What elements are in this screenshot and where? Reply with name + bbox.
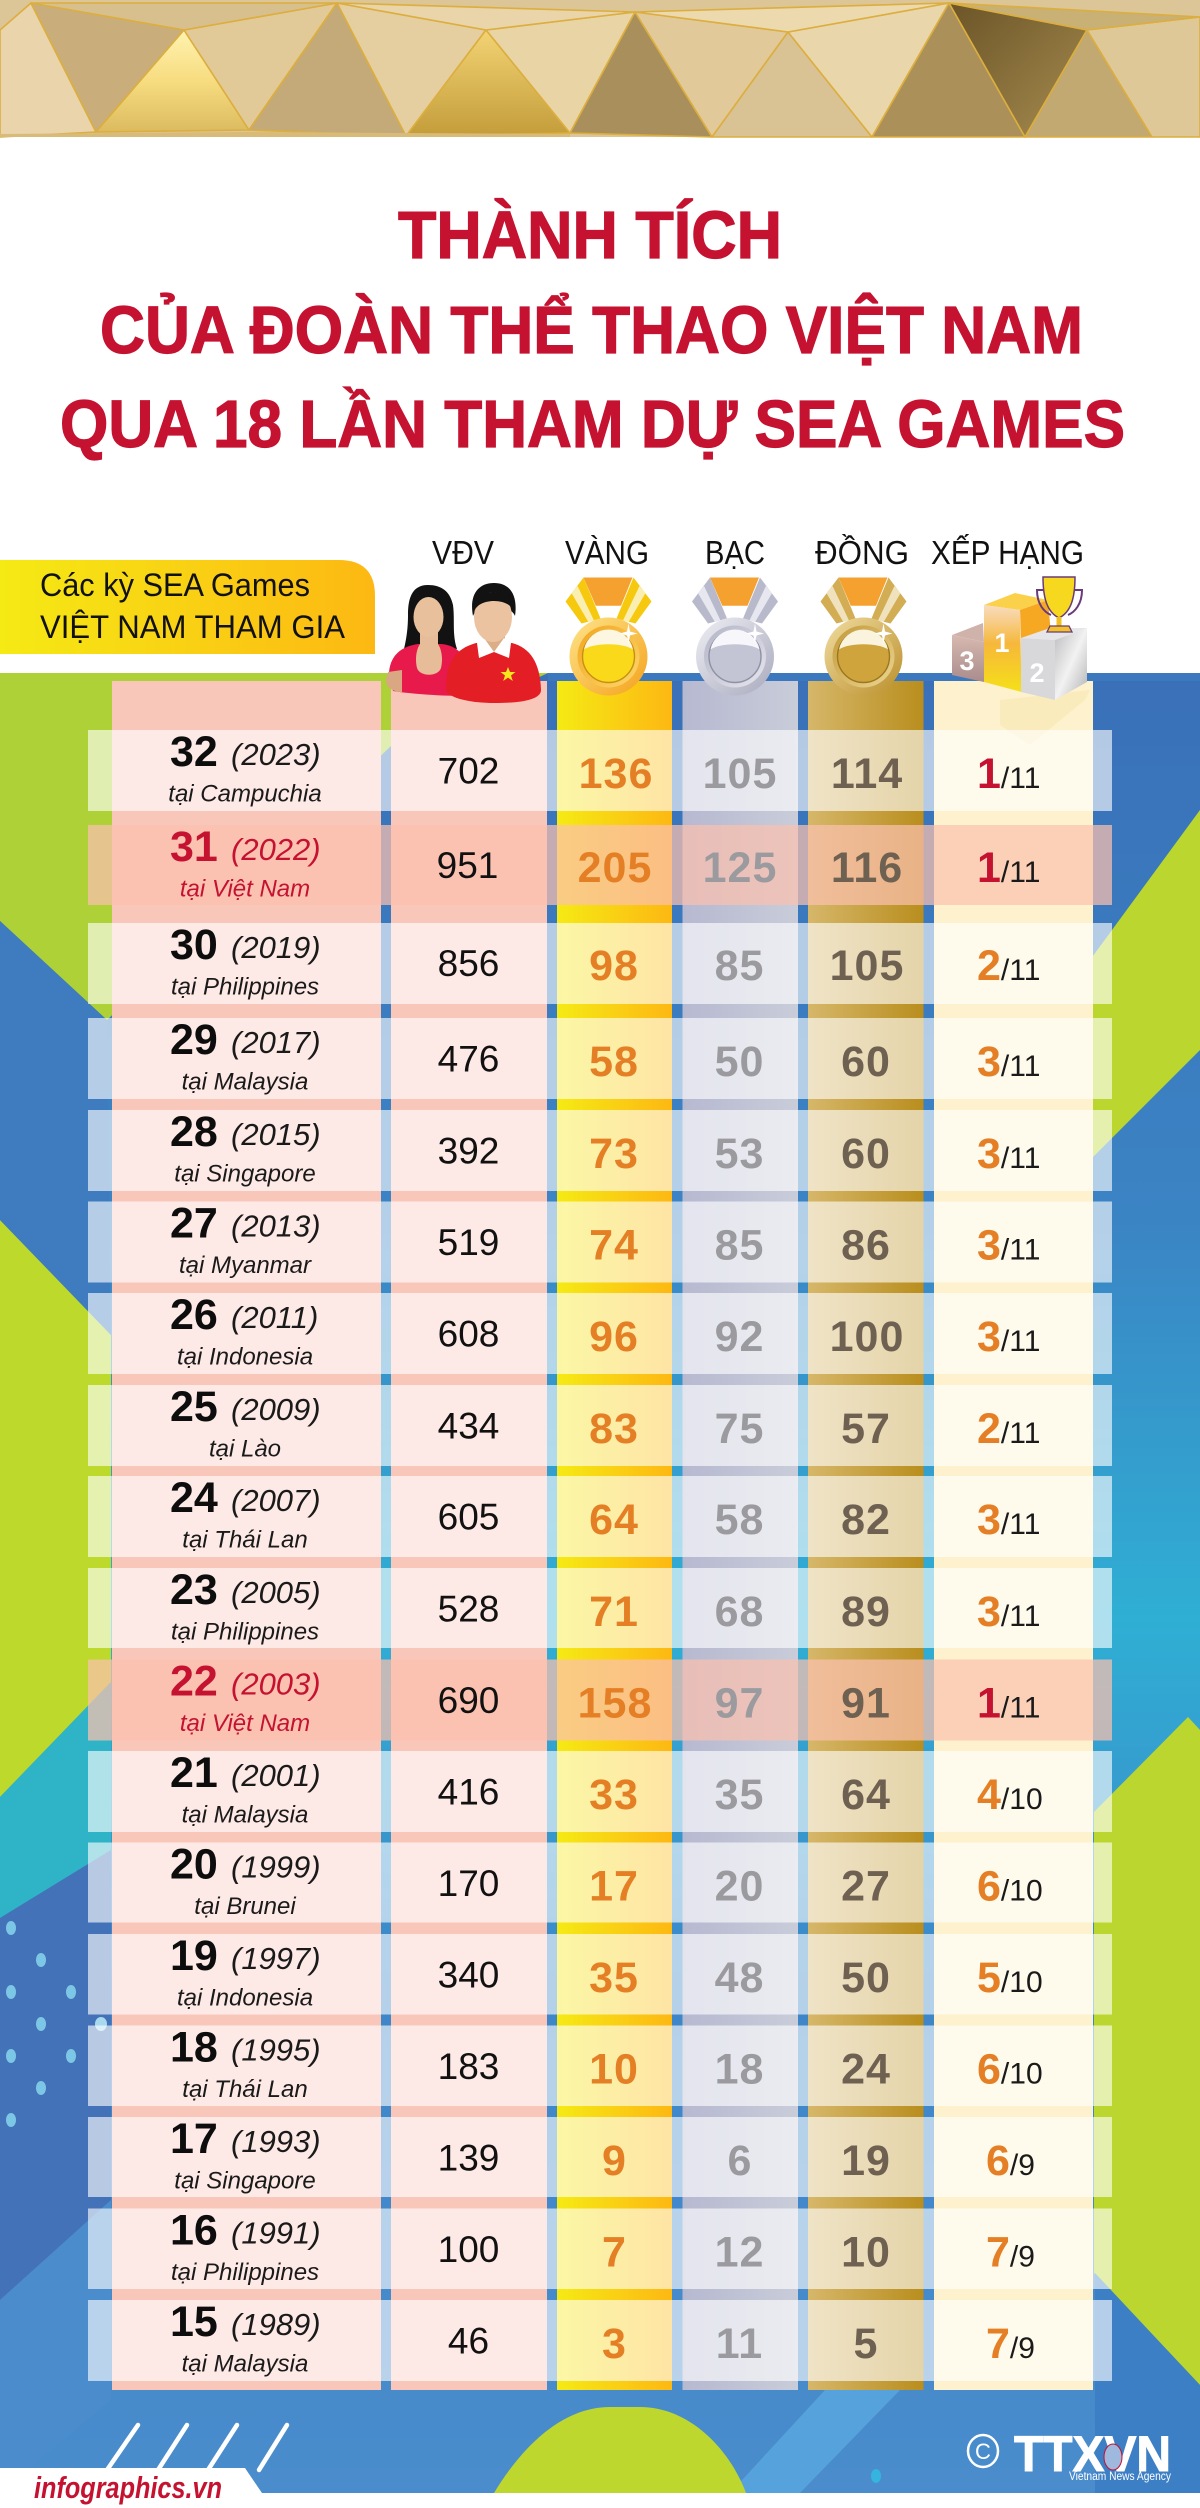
- games 15: (1989): [231, 2307, 321, 2342]
- athletes: 702: [438, 750, 499, 792]
- games 17: 17: [170, 2115, 218, 2163]
- title: THÀNH TÍCH: [398, 198, 782, 273]
- athletes: 46: [448, 2320, 489, 2362]
- games 20: (1999): [231, 1850, 321, 1884]
- bronze: 50: [841, 1954, 891, 2002]
- games 31: (2022): [231, 832, 321, 867]
- gold: 73: [589, 1130, 639, 1178]
- games 21: [170, 1749, 321, 1828]
- athletes: 856: [438, 943, 499, 984]
- games 25: (2009): [231, 1392, 321, 1427]
- rank: 1/11: [977, 844, 1040, 892]
- bronze: 89: [841, 1588, 891, 1636]
- silver: 6: [728, 2137, 752, 2185]
- games 17: tại Singapore: [174, 2168, 316, 2194]
- games 15: 15: [170, 2298, 218, 2346]
- games 16: [170, 2206, 321, 2286]
- games 24: tại Thái Lan: [182, 1526, 308, 1554]
- gold: 7: [602, 2228, 627, 2276]
- athletes: 434: [438, 1406, 499, 1446]
- column headers: VĐV: [432, 534, 494, 571]
- label: SEA Games editions: Các kỳ SEA Games: [40, 567, 310, 603]
- row 24: [88, 1474, 1112, 1557]
- bottom green hump: [494, 2407, 746, 2493]
- games 30: [170, 921, 321, 1000]
- row 21: [88, 1749, 1112, 1832]
- games 18: (1995): [231, 2032, 321, 2068]
- games 18: [170, 2024, 321, 2103]
- silver: 58: [715, 1496, 764, 1544]
- games 18: 18: [170, 2024, 218, 2072]
- rank: 3/11: [977, 1496, 1040, 1544]
- label: SEA Games editions: [0, 560, 375, 654]
- silver: 68: [715, 1588, 764, 1636]
- athletes: 100: [438, 2229, 499, 2270]
- gold: 136: [579, 750, 653, 798]
- games 18: tại Thái Lan: [182, 2076, 308, 2103]
- row 26: [88, 1291, 1112, 1374]
- silver: 18: [715, 2046, 764, 2094]
- bronze: 57: [841, 1405, 891, 1453]
- logo: TTXVN: TTXVN: [1014, 2426, 1171, 2482]
- row 30: [88, 921, 1112, 1004]
- bronze: 60: [841, 1130, 891, 1178]
- silver: 11: [716, 2320, 763, 2368]
- bronze: 24: [841, 2046, 891, 2094]
- footer: infographics.vn: infographics.vn: [34, 2470, 222, 2505]
- rank: 3/11: [977, 1038, 1040, 1086]
- games 29: tại Malaysia: [182, 1068, 308, 1096]
- gold header band: [0, 0, 1200, 137]
- column headers: [432, 534, 1084, 571]
- gold: 64: [589, 1496, 639, 1544]
- row 31: [88, 823, 1112, 905]
- bronze: 10: [841, 2228, 891, 2276]
- bronze: 116: [831, 844, 903, 892]
- bronze: 5: [854, 2320, 878, 2368]
- athletes: 519: [438, 1222, 499, 1263]
- gold: 35: [589, 1954, 639, 2002]
- games 31: 31: [170, 823, 218, 871]
- games 20: 20: [170, 1840, 218, 1888]
- row 16: [88, 2206, 1112, 2289]
- rank: 7/9: [986, 2228, 1035, 2276]
- games 26: tại Indonesia: [177, 1344, 313, 1370]
- games 22: 22: [170, 1658, 218, 1706]
- silver: 20: [715, 1862, 764, 1910]
- icon: athletes: [386, 583, 541, 703]
- title: QUA 18 LẦN THAM DỰ SEA GAMES: [60, 387, 1125, 462]
- title: [60, 198, 1125, 462]
- games 19: [170, 1932, 321, 2012]
- bronze: 91: [841, 1680, 891, 1728]
- column headers: VÀNG: [565, 534, 649, 571]
- gold: 17: [589, 1862, 639, 1910]
- icon: gold medal: [566, 578, 652, 696]
- bronze: 86: [841, 1222, 891, 1270]
- games 17: [170, 2115, 321, 2194]
- icon: podium with trophy: [952, 577, 1090, 745]
- row 28: [88, 1108, 1112, 1191]
- silver: 48: [715, 1954, 764, 2002]
- games 31: tại Việt Nam: [180, 876, 310, 902]
- games 16: 16: [170, 2206, 218, 2254]
- games 22: (2003): [231, 1666, 321, 1702]
- bronze: 100: [830, 1313, 904, 1361]
- athletes: 528: [438, 1588, 499, 1630]
- athletes: 340: [438, 1954, 499, 1996]
- games 28: [170, 1108, 321, 1188]
- games 29: 29: [170, 1016, 218, 1064]
- column headers: XẾP HẠNG: [931, 534, 1084, 571]
- games 24: 24: [170, 1474, 218, 1522]
- gold: 71: [589, 1588, 639, 1636]
- bronze: 27: [841, 1862, 891, 1910]
- row 20: [88, 1840, 1112, 1922]
- games 21: tại Malaysia: [182, 1802, 308, 1828]
- gold: 96: [589, 1313, 639, 1361]
- games 15: [170, 2298, 321, 2378]
- games 27: (2013): [231, 1208, 321, 1244]
- gold: 33: [589, 1771, 639, 1819]
- rank: 6/10: [977, 1862, 1043, 1910]
- athletes: 170: [438, 1863, 499, 1904]
- dots pattern: [6, 1921, 881, 2483]
- games 22: tại Việt Nam: [180, 1710, 310, 1737]
- rank: 3/11: [977, 1313, 1040, 1361]
- gold: 205: [578, 844, 652, 892]
- athletes: 139: [438, 2138, 499, 2178]
- gold: 10: [589, 2046, 639, 2094]
- row 23: [88, 1566, 1112, 1648]
- silver: 85: [715, 942, 764, 990]
- silver: 125: [703, 844, 777, 892]
- rank: 3/11: [977, 1222, 1040, 1270]
- games 27: tại Myanmar: [179, 1252, 312, 1279]
- title: CỦA ĐOÀN THỂ THAO VIỆT NAM: [100, 293, 1083, 368]
- bronze: 105: [830, 942, 904, 990]
- games 26: [170, 1291, 318, 1370]
- gold: 3: [602, 2320, 627, 2368]
- row 18: [88, 2024, 1112, 2106]
- games 23: 23: [170, 1566, 218, 1614]
- games 28: 28: [170, 1108, 218, 1156]
- games 16: tại Philippines: [171, 2259, 319, 2286]
- rank: 1/11: [977, 1680, 1040, 1728]
- gold: 83: [589, 1405, 639, 1453]
- athletes: 608: [438, 1314, 499, 1354]
- row 32: [88, 728, 1112, 811]
- gold: 158: [578, 1680, 652, 1728]
- icon: podium with trophy: 3: [959, 646, 975, 676]
- rank: 6/9: [986, 2137, 1035, 2185]
- silver: 50: [715, 1038, 764, 1086]
- athletes: 476: [438, 1038, 499, 1080]
- games 29: [170, 1016, 321, 1096]
- gold: 58: [589, 1038, 639, 1086]
- athletes: 605: [438, 1496, 499, 1538]
- athletes: 392: [438, 1130, 499, 1172]
- games 19: tại Indonesia: [177, 1984, 313, 2012]
- gold: 9: [602, 2137, 627, 2185]
- games 16: (1991): [231, 2216, 321, 2250]
- row 15: [88, 2298, 1112, 2381]
- games 25: tại Lào: [209, 1436, 281, 1462]
- games 28: (2015): [231, 1117, 321, 1152]
- games 32: tại Campuchia: [168, 780, 322, 808]
- games 27: [170, 1200, 321, 1279]
- games 23: tại Philippines: [171, 1618, 319, 1646]
- games 25: [170, 1383, 321, 1462]
- bronze: 82: [841, 1496, 891, 1544]
- icon: podium with trophy: 1: [994, 628, 1010, 658]
- games 26: 26: [170, 1291, 218, 1339]
- rank: 2/11: [977, 1405, 1040, 1453]
- gold: 74: [589, 1222, 639, 1270]
- column headers: BẠC: [705, 534, 765, 571]
- games 30: 30: [170, 921, 218, 969]
- silver: 92: [715, 1313, 764, 1361]
- gold: 98: [589, 942, 639, 990]
- games 26: (2011): [231, 1300, 318, 1335]
- logo: TTXVN: Vietnam News Agency: [1069, 2471, 1171, 2483]
- bronze: 114: [831, 750, 903, 798]
- games 17: (1993): [231, 2124, 321, 2159]
- athletes: 416: [438, 1772, 499, 1812]
- bronze: 60: [841, 1038, 891, 1086]
- rank: 7/9: [986, 2320, 1035, 2368]
- athletes: 951: [437, 845, 498, 886]
- rank: 4/10: [977, 1771, 1043, 1819]
- row 25: [88, 1383, 1112, 1466]
- games 22: [170, 1658, 321, 1737]
- rank: 3/11: [977, 1130, 1040, 1178]
- games 23: [170, 1566, 321, 1646]
- rank: 3/11: [977, 1588, 1040, 1636]
- icon: silver medal: [692, 578, 778, 696]
- games 20: tại Brunei: [194, 1893, 296, 1920]
- rank: 2/11: [977, 942, 1040, 990]
- bronze: 64: [841, 1771, 891, 1819]
- games 19: (1997): [231, 1941, 321, 1976]
- silver: 105: [703, 750, 777, 798]
- row 17: [88, 2115, 1112, 2197]
- silver: 12: [715, 2228, 764, 2276]
- logo: TTXVN: C: [975, 2439, 991, 2464]
- games 24: (2007): [231, 1483, 321, 1518]
- icon: podium with trophy: 2: [1029, 658, 1045, 688]
- silver: 75: [715, 1405, 764, 1453]
- white slashes: [107, 2425, 287, 2470]
- silver: 85: [715, 1222, 764, 1270]
- games 19: 19: [170, 1932, 218, 1980]
- games 15: tại Malaysia: [182, 2350, 308, 2378]
- games 25: 25: [170, 1383, 218, 1431]
- row 29: [88, 1016, 1112, 1099]
- rank: 6/10: [977, 2046, 1043, 2094]
- background panel: [0, 673, 1200, 2493]
- row 22: [88, 1658, 1112, 1740]
- footer: infographics.vn: [0, 2468, 1200, 2508]
- games 32: [168, 728, 322, 808]
- games 27: 27: [170, 1200, 218, 1248]
- games 30: (2019): [231, 930, 321, 965]
- games 21: (2001): [231, 1758, 321, 1793]
- table columns: [112, 681, 1093, 2390]
- games 24: [170, 1474, 321, 1554]
- games 20: [170, 1840, 321, 1920]
- row 19: [88, 1932, 1112, 2014]
- games 29: (2017): [231, 1025, 321, 1060]
- athletes: 690: [438, 1680, 499, 1721]
- icon: bronze medal: [820, 578, 906, 696]
- row 27: [88, 1200, 1112, 1282]
- silver: 53: [715, 1130, 764, 1178]
- games 32: 32: [170, 728, 218, 776]
- label: SEA Games editions: VIỆT NAM THAM GIA: [40, 609, 346, 645]
- games 31: [170, 823, 321, 902]
- bronze: 19: [841, 2137, 891, 2185]
- rank: 1/11: [977, 750, 1040, 798]
- games 32: (2023): [231, 737, 321, 772]
- silver: 35: [715, 1771, 764, 1819]
- games 21: 21: [170, 1749, 218, 1797]
- games 30: tại Philippines: [171, 974, 319, 1000]
- athletes: 183: [438, 2046, 499, 2087]
- column headers: ĐỒNG: [815, 534, 909, 571]
- silver: 97: [715, 1680, 764, 1728]
- games 23: (2005): [231, 1575, 321, 1610]
- games 28: tại Singapore: [174, 1160, 316, 1188]
- rank: 5/10: [977, 1954, 1043, 2002]
